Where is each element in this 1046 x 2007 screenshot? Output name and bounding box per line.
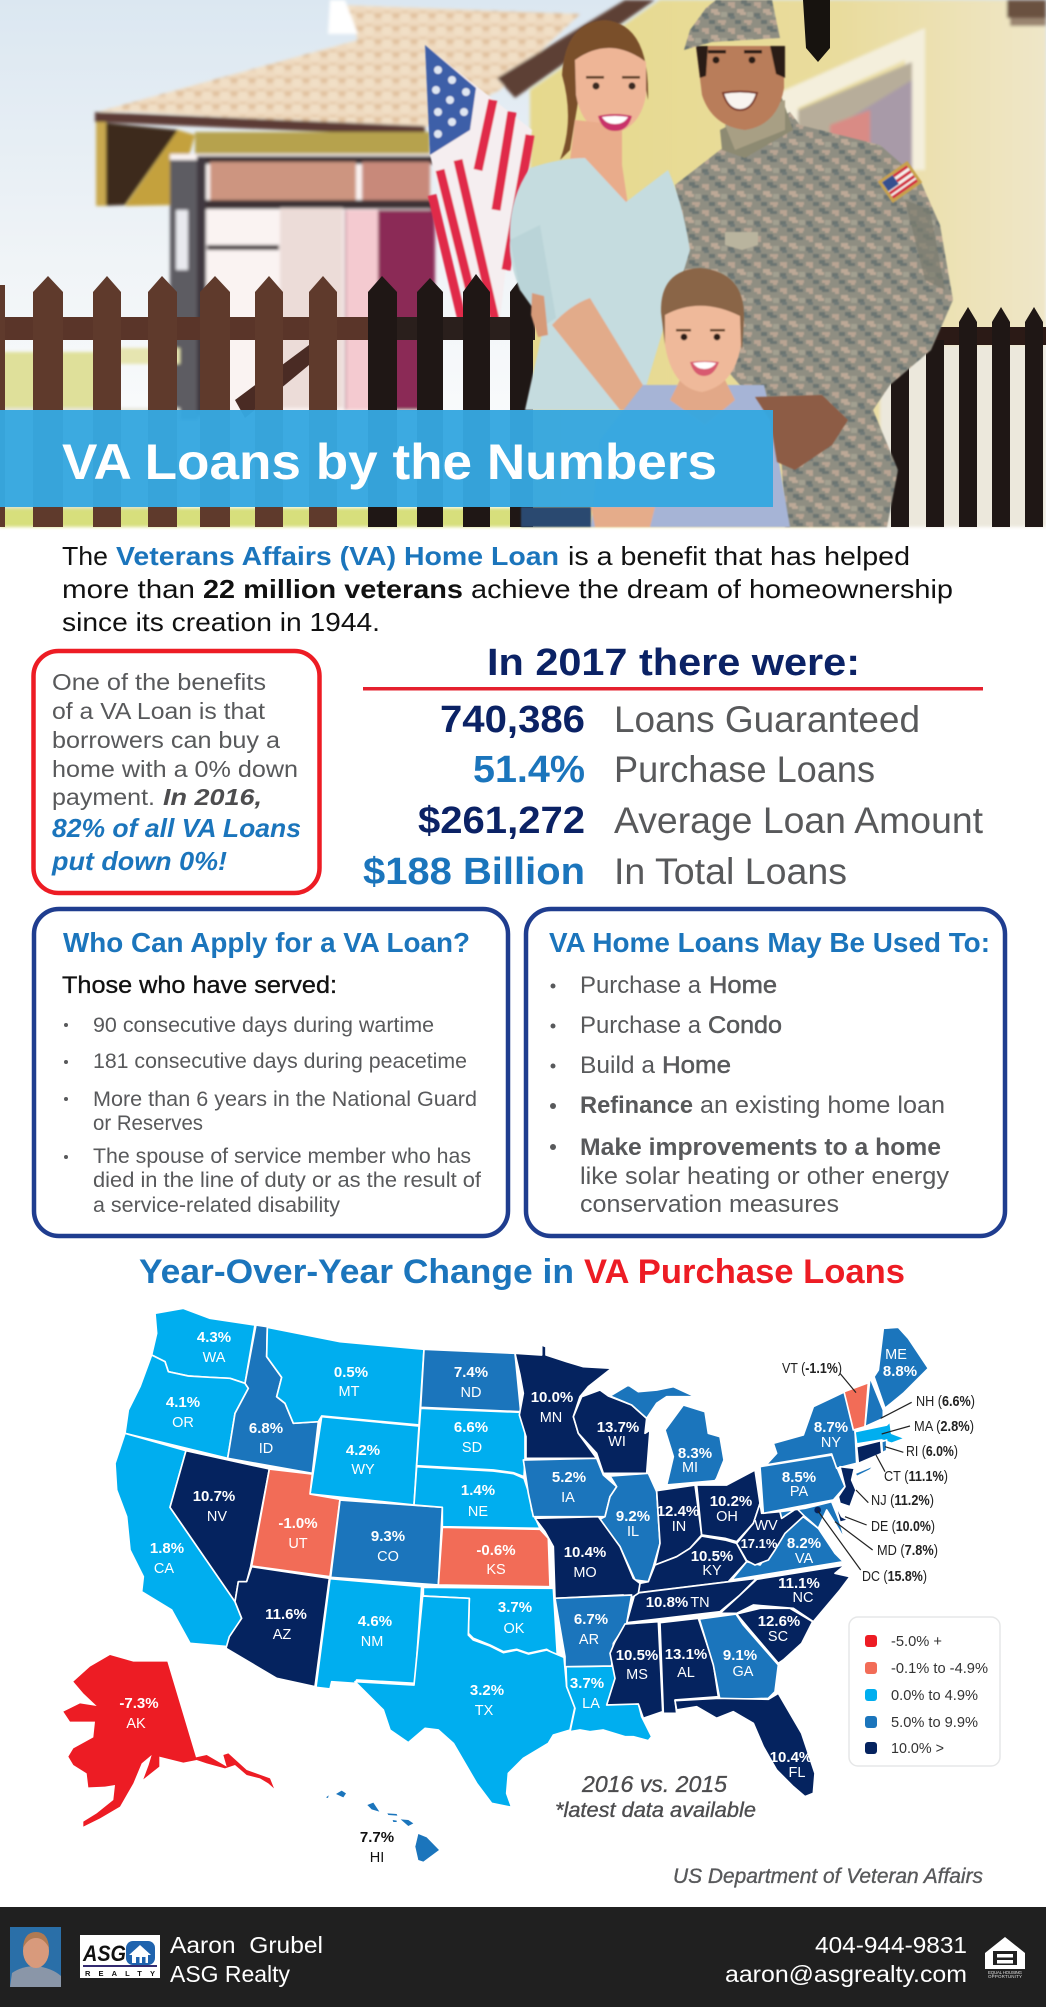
panel: 0% down callout: payment.: [52, 784, 155, 810]
state value labels: OH: [716, 1509, 738, 1525]
panel: 0% down callout: borrowers can buy a: [52, 727, 280, 753]
panel: 0% down callout: In 2016,: [163, 784, 262, 810]
state value labels: ID: [259, 1441, 273, 1457]
stat: purchase loans: 51.4%: [473, 749, 585, 791]
map heading: Year-Over-Year Change in: [139, 1253, 574, 1291]
soldier father: [675, 0, 953, 527]
state value labels: NV: [207, 1509, 227, 1525]
state value labels: 10.4%: [770, 1749, 812, 1766]
state value labels: [119, 1329, 917, 1866]
state value labels: MS: [626, 1667, 648, 1683]
state value labels: AK: [126, 1716, 146, 1732]
daughter: [521, 268, 790, 527]
state value labels: 7.7%: [360, 1829, 394, 1846]
uses bullets: Make improvements to a home: [580, 1134, 941, 1161]
icon: equal housing opportunity: OPPORTUNITY: [988, 1974, 1022, 1979]
state value labels: 1.8%: [150, 1540, 184, 1557]
state value labels: 10.0%: [531, 1389, 573, 1406]
uses bullets: Refinance: [580, 1092, 693, 1119]
panel heading: VA Home Loans May Be Used To:: [549, 927, 990, 958]
state value labels: HI: [370, 1850, 384, 1866]
state value labels: -0.6%: [476, 1542, 516, 1559]
title banner: VA Loans by the Numbers: [62, 434, 717, 490]
agent name: Aaron Grubel: [170, 1932, 323, 1958]
small-state callouts: VT (-1.1%): [782, 1361, 842, 1377]
state value labels: NC: [793, 1590, 813, 1606]
map legend: 0.0% to 4.9%: [891, 1687, 978, 1704]
state value labels: 12.4%: [657, 1503, 699, 1520]
state value labels: MI: [682, 1460, 698, 1476]
state value labels: 11.6%: [265, 1606, 307, 1623]
state value labels: FL: [789, 1765, 805, 1781]
state value labels: 8.8%: [883, 1363, 917, 1380]
panel: may be used to: [526, 909, 1005, 1236]
icon: equal housing opportunity: [985, 1937, 1025, 1979]
state value labels: PA: [790, 1484, 808, 1500]
southeastern states: [607, 1608, 815, 1797]
map legend: [849, 1617, 1000, 1766]
panel: 0% down callout: One of the benefits: [52, 669, 266, 695]
state value labels: OR: [172, 1415, 194, 1431]
icon: wall lantern: [803, 0, 830, 62]
heading: In 2017 there were: In 2017 there were:: [487, 642, 860, 684]
state value labels: IL: [627, 1524, 639, 1540]
state value labels: NE: [468, 1504, 488, 1520]
lawn and hedge: [0, 352, 100, 410]
map legend: -5.0% +: [891, 1633, 942, 1650]
state value labels: 12.6%: [758, 1613, 800, 1630]
stat: purchase loans: [473, 749, 875, 791]
western states: [115, 1308, 550, 1689]
state value labels: KY: [702, 1563, 722, 1579]
panel: 0% down callout: 82% of all VA Loans: [52, 813, 301, 843]
small-state callouts: DE (10.0%): [871, 1519, 935, 1535]
small-state callouts: NJ (11.2%): [871, 1493, 934, 1509]
map date note: 2016 vs. 2015: [581, 1771, 727, 1797]
state value labels: 3.7%: [570, 1675, 604, 1692]
state value labels: 8.7%: [814, 1419, 848, 1436]
state value labels: 10.2%: [710, 1493, 752, 1510]
state value labels: KS: [486, 1562, 506, 1578]
uses bullets: like solar heating or other energy: [580, 1163, 949, 1190]
small-state leader lines: [818, 1373, 912, 1570]
logo: ASG Realty: REALTY: [85, 1969, 155, 1978]
state value labels: -1.0%: [278, 1515, 318, 1532]
map legend: 10.0% >: [891, 1740, 944, 1757]
state value labels: 10.5%: [691, 1548, 733, 1565]
uses bullets: Condo: [708, 1012, 782, 1039]
logo: ASG Realty: [80, 1935, 160, 1978]
state value labels: CA: [154, 1561, 174, 1577]
state value labels: SC: [768, 1629, 788, 1645]
state value labels: 5.2%: [552, 1469, 586, 1486]
panel: 0% down callout: of a VA Loan is that: [52, 698, 266, 724]
map legend: 5.0% to 9.9%: [891, 1714, 978, 1731]
state value labels: 3.7%: [498, 1599, 532, 1616]
eligibility bullets: 181 consecutive days during peacetime: [93, 1050, 467, 1073]
small-state callouts: RI (6.0%): [906, 1444, 958, 1460]
state value labels: 4.6%: [358, 1613, 392, 1630]
state value labels: AL: [677, 1665, 695, 1681]
state value labels: WY: [351, 1462, 375, 1478]
eligibility bullets: The spouse of service member who has: [93, 1145, 471, 1168]
state: Alaska: [63, 1655, 274, 1827]
american flag on pole: [425, 45, 532, 320]
state value labels: 9.2%: [616, 1508, 650, 1525]
state value labels: 8.2%: [787, 1535, 821, 1552]
stat: total loans: $188 Billion: [363, 851, 585, 893]
state value labels: WI: [608, 1434, 626, 1450]
uses bullets: Purchase a: [580, 1012, 702, 1039]
state value labels: 10.7%: [193, 1488, 235, 1505]
state value labels: 13.7%: [597, 1419, 639, 1436]
panel: 0% down callout: put down 0%!: [51, 846, 227, 876]
small-state callouts: [782, 1361, 975, 1585]
map date note: *latest data available: [555, 1799, 756, 1822]
state value labels: ME: [885, 1347, 907, 1363]
state value labels: GA: [733, 1664, 754, 1680]
state value labels: WV: [754, 1518, 778, 1534]
uses bullets: Home: [709, 972, 777, 999]
agency name: ASG Realty: [170, 1961, 290, 1987]
shoulder flag patch: [878, 161, 922, 203]
intro paragraph: is a benefit that has helped: [568, 541, 910, 571]
state value labels: IN: [672, 1519, 686, 1535]
state value labels: 10.8%: [646, 1594, 688, 1611]
stat: total loans: [363, 851, 847, 893]
eligibility bullets: died in the line of duty or as the result of: [93, 1169, 481, 1192]
state value labels: 9.1%: [723, 1647, 757, 1664]
intro paragraph: since its creation in 1944.: [62, 607, 380, 637]
state value labels: 0.5%: [334, 1364, 368, 1381]
state value labels: TX: [475, 1703, 494, 1719]
state value labels: 13.1%: [665, 1646, 707, 1663]
eligibility bullets: 90 consecutive days during wartime: [93, 1014, 434, 1037]
stat: loans guaranteed: 740,386: [440, 699, 585, 741]
state value labels: LA: [582, 1696, 600, 1712]
stat: average loan amount: $261,272: [418, 800, 585, 842]
state value labels: CO: [377, 1549, 399, 1565]
sub heading: Those who have served:: [62, 972, 337, 999]
window with flag on right wall: [778, 28, 925, 170]
stat: loans guaranteed: [440, 699, 920, 741]
state value labels: 17.1%: [741, 1536, 778, 1551]
small-state callouts: NH (6.6%): [916, 1394, 975, 1410]
uses bullets: an existing home loan: [700, 1092, 945, 1119]
state value labels: 9.3%: [371, 1528, 405, 1545]
state value labels: 8.5%: [782, 1469, 816, 1486]
intro paragraph: more than: [62, 574, 195, 604]
uses bullets: conservation measures: [580, 1191, 839, 1218]
intro paragraph: The: [62, 541, 108, 571]
state value labels: TN: [690, 1595, 710, 1611]
stat: loans guaranteed: Loans Guaranteed: [614, 699, 920, 740]
state value labels: 10.4%: [564, 1544, 606, 1561]
small-state callouts: DC (15.8%): [862, 1569, 927, 1585]
state value labels: WA: [203, 1350, 226, 1366]
uses bullets: Home: [662, 1052, 731, 1079]
map legend: -0.1% to -4.9%: [891, 1660, 988, 1677]
small-state callouts: MA (2.8%): [914, 1419, 974, 1435]
wooden fence: [0, 274, 1046, 527]
map heading: [139, 1253, 905, 1291]
panel: who can apply: [34, 909, 508, 1236]
map heading: VA Purchase Loans: [584, 1253, 905, 1291]
phone: 404-944-9831: [815, 1932, 967, 1958]
state value labels: 4.2%: [346, 1442, 380, 1459]
state value labels: 4.3%: [197, 1329, 231, 1346]
central and northeastern states: [515, 1327, 928, 1667]
state value labels: MN: [540, 1410, 562, 1426]
stat: purchase loans: Purchase Loans: [614, 749, 875, 790]
hero photo: military family in front of house: [0, 0, 1046, 527]
state value labels: AR: [579, 1632, 599, 1648]
panel: 0% down callout: [34, 651, 320, 893]
state value labels: MT: [339, 1384, 360, 1400]
intro paragraph: [62, 541, 953, 637]
state value labels: AZ: [273, 1627, 291, 1643]
small-state callouts: MD (7.8%): [877, 1543, 938, 1559]
uses bullets: Build a: [580, 1052, 656, 1079]
state value labels: 6.7%: [574, 1611, 608, 1628]
state value labels: VA: [795, 1551, 813, 1567]
state value labels: 6.6%: [454, 1419, 488, 1436]
state value labels: SD: [462, 1440, 482, 1456]
red divider rule: [363, 687, 983, 690]
state value labels: OK: [504, 1621, 525, 1637]
state value labels: NY: [821, 1435, 841, 1451]
eligibility bullets: More than 6 years in the National Guard: [93, 1088, 477, 1111]
state value labels: 10.5%: [616, 1647, 658, 1664]
state value labels: 4.1%: [166, 1394, 200, 1411]
intro paragraph: 22 million veterans: [203, 574, 463, 604]
source credit: US Department of Veteran Affairs: [673, 1865, 983, 1888]
US choropleth map: [63, 1308, 975, 1866]
house background: [0, 0, 1046, 527]
map date note: [555, 1771, 756, 1822]
eligibility bullets: or Reserves: [93, 1112, 203, 1135]
logo: ASG Realty: ASG: [82, 1941, 126, 1966]
soldier's hand on daughter: [755, 395, 848, 470]
stat: average loan amount: Average Loan Amount: [614, 800, 984, 841]
email: aaron@asgrealty.com: [725, 1961, 967, 1987]
state value labels: 7.4%: [454, 1364, 488, 1381]
state value labels: 11.1%: [778, 1575, 820, 1592]
face: [696, 46, 784, 130]
uses bullets: Purchase a: [580, 972, 702, 999]
stat: total loans: In Total Loans: [614, 851, 847, 892]
OK and TX: [355, 1587, 652, 1807]
panel: 0% down callout: home with a 0% down: [52, 756, 298, 782]
small-state callouts: CT (11.1%): [884, 1469, 948, 1485]
state value labels: 3.2%: [470, 1682, 504, 1699]
panel heading: Who Can Apply for a VA Loan?: [63, 927, 470, 958]
state value labels: IA: [561, 1490, 575, 1506]
state value labels: NM: [361, 1634, 383, 1650]
uses bullets: [550, 972, 949, 1218]
state value labels: 6.8%: [249, 1420, 283, 1437]
state value labels: 8.3%: [678, 1445, 712, 1462]
state value labels: ND: [461, 1385, 481, 1401]
intro paragraph: Veterans Affairs (VA) Home Loan: [116, 541, 559, 571]
state value labels: -7.3%: [119, 1695, 159, 1712]
intro paragraph: achieve the dream of homeownership: [471, 574, 953, 604]
state value labels: 1.4%: [461, 1482, 495, 1499]
agent photo: [10, 1927, 61, 1987]
icon: equal housing opportunity: EQUAL HOUSING: [988, 1970, 1022, 1975]
eligibility bullets: a service-related disability: [93, 1194, 341, 1217]
footer bar: [0, 1907, 1046, 2007]
eligibility bullets: [64, 1014, 481, 1217]
state value labels: MO: [573, 1565, 597, 1581]
title banner: [0, 410, 773, 507]
stat: average loan amount: [418, 800, 984, 842]
stats list: [363, 699, 984, 893]
mother: [510, 20, 690, 410]
state value labels: UT: [288, 1536, 308, 1552]
state: Hawaii: [326, 1791, 439, 1862]
